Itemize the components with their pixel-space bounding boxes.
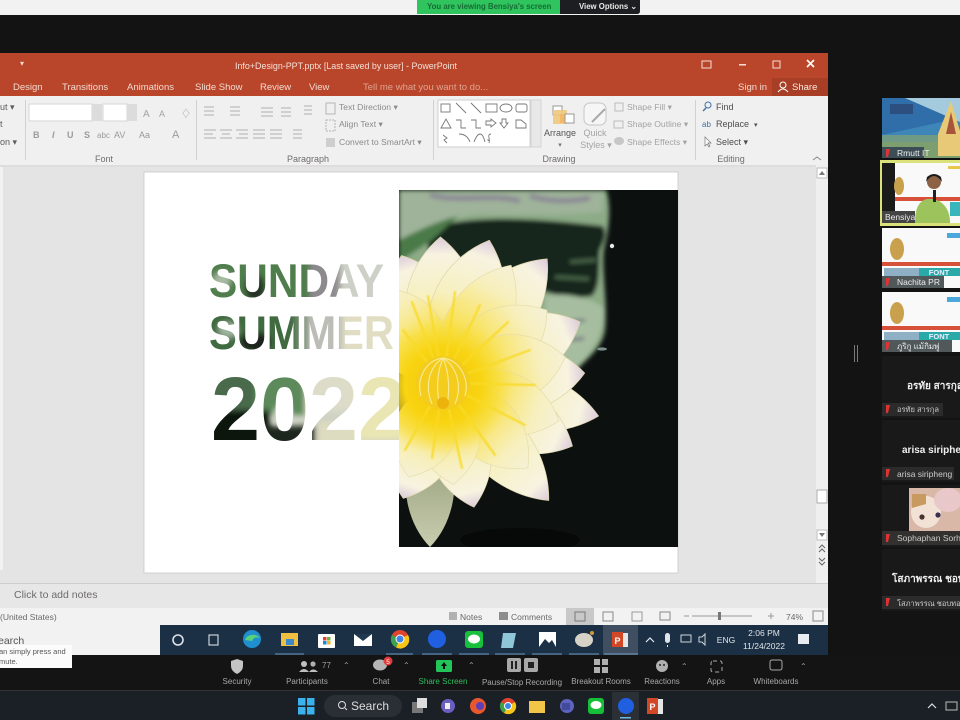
tile: fourth participant	[882, 292, 960, 352]
drawing group: Drawing	[542, 154, 576, 164]
status bar: Comments	[511, 612, 552, 622]
editing group	[702, 102, 821, 164]
font group: ♢	[181, 108, 191, 120]
participants: Participants	[286, 677, 328, 686]
slide title: Sunday Summer 2022: SUNDAY	[209, 254, 384, 307]
font group: A	[172, 129, 180, 141]
notes pane: Click to add notes	[14, 589, 97, 601]
top strip	[0, 0, 960, 15]
editing group: Replace	[716, 119, 749, 129]
status bar: Notes	[460, 612, 482, 622]
security	[223, 659, 251, 686]
drawing group: ▾	[558, 142, 562, 149]
tile: Orathai	[882, 380, 960, 416]
tile: Nachita PR: FONT	[929, 268, 950, 277]
status bar	[0, 608, 828, 625]
tile: Rmutt IT	[882, 98, 960, 158]
ribbon tabs: Share	[792, 82, 817, 93]
slide title: Sunday Summer 2022: 2022	[211, 360, 407, 460]
ribbon tabs: Tell me what you want to do...	[363, 82, 488, 93]
ribbon tabs: Sign in	[738, 82, 767, 93]
ribbon tabs: Slide Show	[195, 82, 243, 93]
tile: Orathai: อรทัย สารกุล	[897, 405, 939, 414]
search box	[0, 625, 160, 655]
tile: arisa siripheng	[882, 446, 960, 480]
paragraph group: Convert to SmartArt ▾	[339, 137, 422, 147]
stamens	[399, 317, 510, 452]
tile: Bensiya: Bensiya	[885, 212, 916, 222]
tile: Sophaphan	[882, 485, 960, 547]
panel divider handle	[854, 345, 858, 362]
reactions	[644, 660, 688, 686]
font group	[29, 104, 191, 164]
paragraph group: Text Direction ▾	[339, 102, 398, 112]
recording: Pause/Stop Recording	[482, 678, 562, 687]
editing group: Find	[716, 102, 734, 112]
drawing group: Styles ▾	[580, 140, 612, 150]
editing group: ab	[702, 120, 711, 129]
participants	[286, 661, 350, 686]
lily pad	[399, 190, 609, 385]
font group: Aa	[139, 130, 150, 140]
drawing group	[438, 100, 689, 164]
tile: Rmutt IT: Rmutt IT	[897, 148, 930, 158]
recording	[482, 658, 562, 687]
font group: U	[67, 130, 74, 140]
share screen: ⌃	[468, 661, 475, 670]
inner petals	[399, 264, 566, 485]
ribbon tabs: Review	[260, 82, 291, 93]
share screen	[419, 660, 475, 686]
font group: A	[143, 109, 150, 120]
chat: ⌃	[403, 661, 410, 670]
font group: Font	[95, 154, 114, 164]
whiteboards	[754, 660, 807, 686]
clipboard text	[0, 102, 18, 147]
breakout rooms	[571, 659, 631, 686]
banner: viewing screen: You are viewing Bensiya's screen	[427, 2, 552, 11]
drawing group: Shape Fill ▾	[627, 102, 673, 112]
slide title: Sunday Summer 2022: SUMMER	[209, 306, 394, 359]
apps: Apps	[707, 677, 725, 686]
ribbon tabs: View	[309, 82, 330, 93]
banner: viewing screen	[417, 0, 640, 14]
tile: Nachita PR	[882, 228, 960, 288]
status bar: 74%	[786, 612, 803, 622]
tile: Bensiya	[880, 160, 960, 226]
tile: fourth participant: ภูริกู แม้กิมพู่	[897, 342, 939, 352]
powerpoint title bar: Info+Design-PPT.pptx [Last saved by user] - PowerPoint	[235, 61, 457, 72]
reactions: ⌃	[681, 662, 688, 671]
slide title: Sunday Summer 2022	[209, 254, 407, 460]
whiteboards: Whiteboards	[754, 677, 798, 686]
tile: fourth participant: FONT	[929, 332, 950, 341]
chat: 5	[386, 659, 390, 666]
font group: I	[52, 130, 55, 140]
clipboard text: on ▾	[0, 137, 18, 147]
apps	[707, 661, 725, 686]
scrollbar	[816, 165, 828, 583]
windows taskbar: P	[649, 702, 656, 712]
participants: 77	[322, 661, 331, 670]
lily center	[416, 356, 470, 410]
font group: abc	[97, 131, 110, 140]
security: Security	[223, 677, 251, 686]
share screen: Share Screen	[419, 677, 467, 686]
banner: viewing screen: View Options ⌄	[579, 2, 637, 11]
zoom toolbar	[0, 655, 960, 691]
slide	[144, 172, 678, 573]
ribbon	[0, 96, 828, 167]
clipboard text: t	[0, 119, 3, 129]
remote taskbar	[160, 625, 828, 655]
font group: A	[159, 109, 165, 119]
status bar: (United States)	[0, 612, 57, 622]
clipboard text: ut ▾	[0, 102, 15, 112]
remote taskbar: ENG	[717, 635, 735, 645]
app icons	[243, 630, 261, 648]
workspace	[0, 167, 816, 583]
reactions: Reactions	[644, 677, 680, 686]
outer petals	[399, 236, 599, 508]
powerpoint title bar	[0, 53, 828, 96]
ribbon tabs: Animations	[127, 82, 174, 93]
drawing group: Arrange	[544, 128, 576, 138]
whiteboards: ⌃	[800, 662, 807, 671]
ribbon tabs	[13, 78, 828, 96]
ribbon tabs: Transitions	[62, 82, 108, 93]
font group: B	[33, 130, 40, 140]
left thumbnail pane edge	[0, 167, 3, 570]
remote taskbar: 2:06 PM	[748, 628, 780, 638]
back petal	[406, 478, 454, 547]
drawing group: Shape Outline ▾	[627, 119, 689, 129]
paragraph group	[204, 102, 422, 164]
breakout rooms: Breakout Rooms	[571, 677, 631, 686]
paragraph group: Paragraph	[287, 154, 329, 164]
tile: Nachita PR: Nachita PR	[897, 277, 940, 287]
powerpoint title bar: ▾	[20, 59, 24, 68]
editing group: Editing	[717, 154, 745, 164]
font group: S	[84, 130, 90, 140]
tile: arisa siripheng: arisa siripheng	[897, 469, 953, 479]
chat	[373, 656, 410, 686]
drawing group: Quick	[583, 128, 607, 138]
tooltip	[0, 645, 72, 668]
editing group: Select ▾	[716, 137, 749, 147]
participants panel	[880, 98, 960, 611]
windows taskbar	[0, 691, 960, 720]
font group: AV	[114, 130, 125, 140]
paragraph group: Align Text ▾	[339, 119, 383, 129]
drawing group: Shape Effects ▾	[627, 137, 688, 147]
photo: water lily	[399, 190, 678, 547]
tile: Sopaphan Thai	[882, 572, 960, 609]
notes pane	[0, 583, 828, 608]
editing group: ▾	[754, 122, 758, 129]
remote taskbar: 11/24/2022	[743, 641, 785, 651]
windows taskbar: Search	[351, 699, 389, 713]
tooltip: an simply press and	[0, 647, 66, 656]
participants: ⌃	[343, 661, 350, 670]
remote taskbar: P	[614, 636, 621, 646]
ribbon tabs: Design	[13, 82, 43, 93]
chat: Chat	[373, 677, 390, 686]
